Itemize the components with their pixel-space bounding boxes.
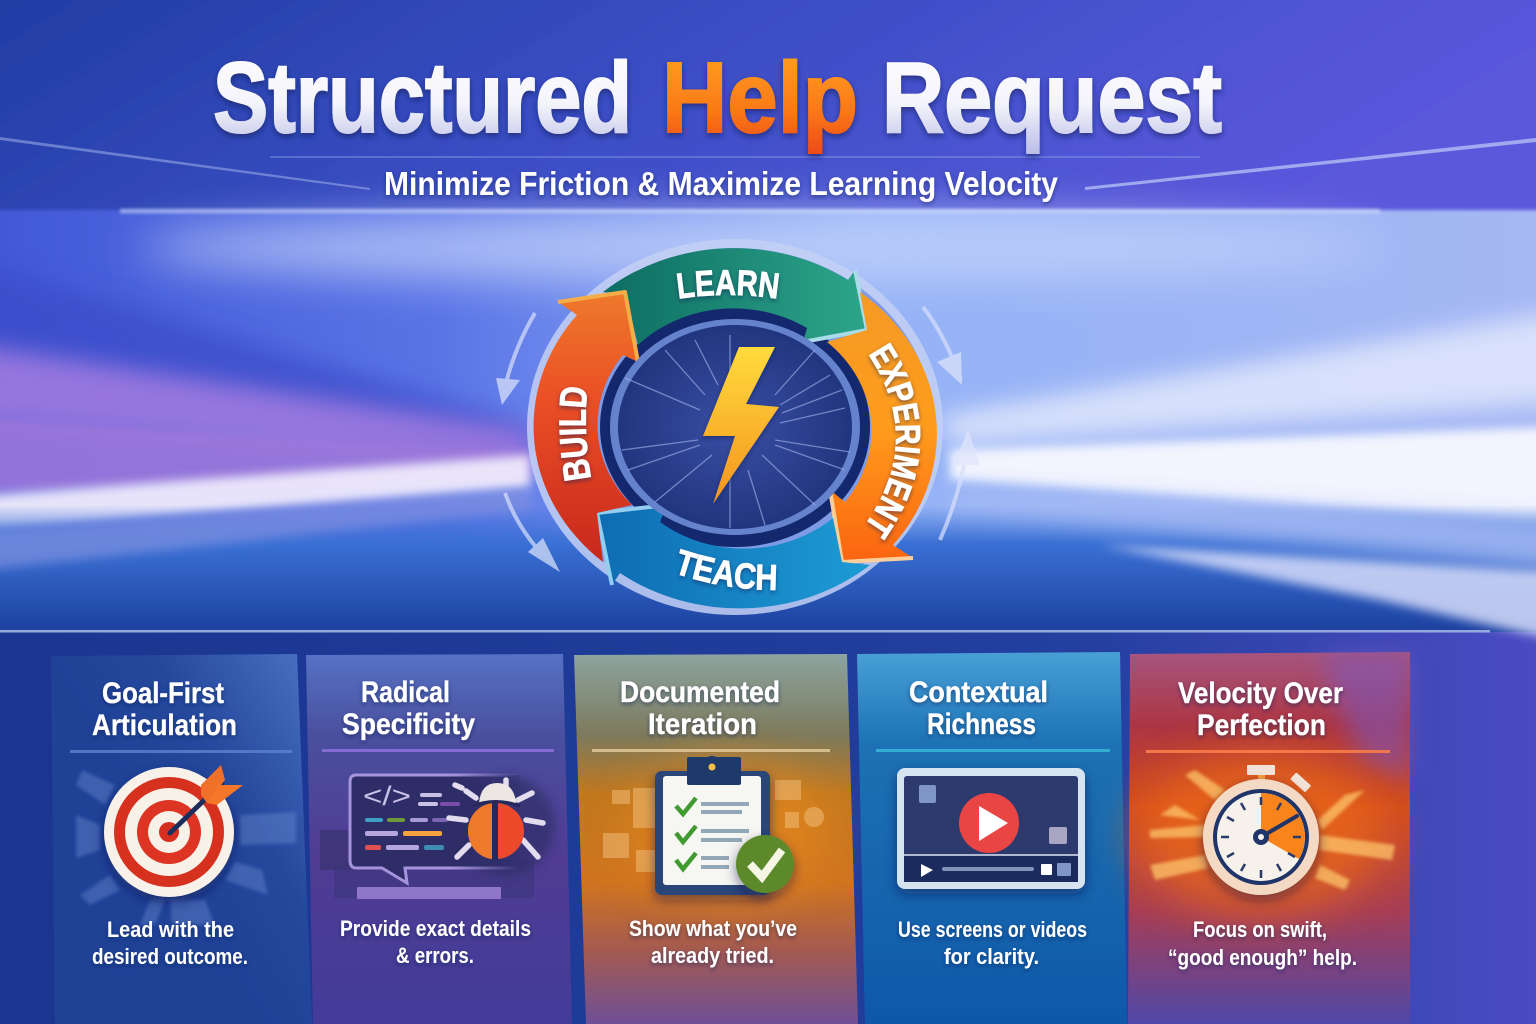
description: “good enough” help. xyxy=(1168,945,1357,970)
arrow: learn xyxy=(603,248,867,345)
heading xyxy=(92,677,237,742)
heading: Velocity Over xyxy=(1178,677,1343,710)
description xyxy=(92,917,248,969)
arrow: experiment: EXPERIMENT xyxy=(865,342,924,544)
title: Request xyxy=(882,42,1222,154)
icon: stopwatch xyxy=(1150,765,1395,895)
heading: Richness xyxy=(927,708,1036,741)
icon: target with arrow xyxy=(76,765,296,925)
heading xyxy=(909,676,1048,741)
heading xyxy=(342,676,475,741)
icon: video player xyxy=(897,768,1085,889)
heading: Specificity xyxy=(342,708,475,741)
heading: Contextual xyxy=(909,676,1048,709)
arrow: teach: TEACH xyxy=(678,548,778,594)
description: Focus on swift, xyxy=(1193,917,1327,942)
heading: Articulation xyxy=(92,709,237,742)
title: Help xyxy=(662,42,858,154)
heading: Perfection xyxy=(1197,709,1326,742)
panel: documented iteration xyxy=(574,654,858,1024)
side arrows xyxy=(496,307,980,572)
description: Use screens or videos xyxy=(898,917,1087,942)
cycle diagram xyxy=(496,239,980,615)
description: already tried. xyxy=(651,943,774,968)
subtitle: Minimize Friction & Maximize Learning Velocity xyxy=(384,165,1059,202)
panel: velocity over perfection xyxy=(1128,652,1410,1024)
arrow: build: BUILD xyxy=(556,386,594,486)
icon: lightning bolt xyxy=(703,347,779,504)
icon: code window with bug xyxy=(320,775,555,899)
title xyxy=(213,42,1222,154)
dark core xyxy=(600,307,870,547)
center dial xyxy=(610,319,860,535)
panel: goal-first articulation xyxy=(51,654,312,1024)
heading: Iteration xyxy=(648,708,757,741)
title: Structured xyxy=(213,42,632,154)
heading: Documented xyxy=(620,676,780,709)
heading xyxy=(620,676,780,741)
description xyxy=(898,917,1087,969)
arrow: experiment xyxy=(827,292,937,564)
panel: contextual richness xyxy=(857,652,1127,1024)
heading: Radical xyxy=(361,676,450,709)
description: Provide exact details xyxy=(340,916,531,941)
description xyxy=(340,916,531,968)
outer ring xyxy=(527,239,943,615)
icon: clipboard xyxy=(603,756,824,895)
description: & errors. xyxy=(396,943,474,968)
arrow: build xyxy=(534,290,640,562)
arrow: teach xyxy=(597,505,870,608)
description xyxy=(629,916,797,968)
panel: radical specificity xyxy=(306,654,572,1024)
arrow: learn: LEARN xyxy=(674,270,782,303)
description: Show what you’ve xyxy=(629,916,797,941)
description: Lead with the xyxy=(107,917,234,942)
description xyxy=(1168,917,1357,970)
description: desired outcome. xyxy=(92,944,248,969)
heading: Goal-First xyxy=(102,677,224,710)
description: for clarity. xyxy=(944,944,1039,969)
icon: code window with bug: </> xyxy=(363,781,411,811)
heading xyxy=(1178,677,1343,742)
